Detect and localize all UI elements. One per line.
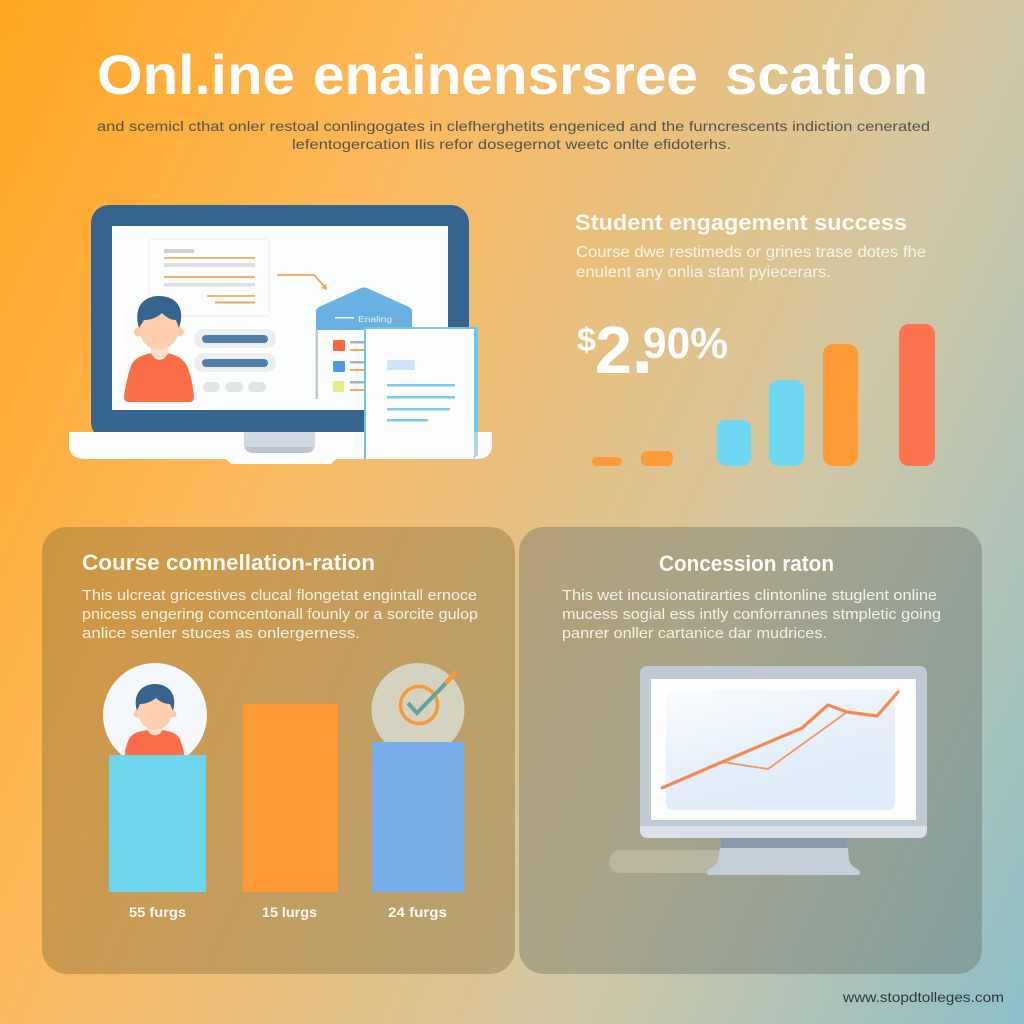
bar labels: 55 furgs: [129, 904, 186, 920]
laptop screen: [112, 226, 448, 410]
course panel heading: Course comnellation-ration: [82, 550, 375, 575]
big statistic: .: [632, 302, 653, 390]
title: [97, 43, 928, 106]
document sheet: [364, 327, 478, 459]
concession panel text: mucess sogial ess intly conforrannes stmpletic going: [562, 607, 941, 623]
laptop lid: [91, 205, 469, 440]
title: Onl.ine: [97, 43, 295, 106]
text card on screen: [150, 240, 268, 315]
title: enainensrsree: [313, 43, 698, 106]
student engagement text: [576, 244, 926, 281]
line chart: [662, 690, 898, 810]
bar chart: engagement: [592, 324, 935, 466]
laptop base: [69, 432, 492, 464]
bar labels: 24 furgs: [388, 904, 447, 920]
pills on screen: [194, 329, 276, 392]
big statistic: 90%: [643, 319, 728, 368]
monitor body: [640, 666, 927, 838]
connector arrow: [277, 275, 327, 290]
concession panel text: This wet incusionatirarties clintonline stuglent online: [562, 588, 937, 604]
student engagement text: Course dwe restimeds or grines trase dotes fhe: [576, 244, 926, 261]
monitor illustration: [609, 666, 927, 875]
desk shadow: [609, 850, 739, 873]
footer url: www.stopdtolleges.com: [842, 989, 1004, 1005]
icon: avatar in circle: [103, 663, 207, 755]
bar labels: [129, 904, 447, 920]
bar labels: 15 lurgs: [262, 904, 317, 920]
laptop illustration: [69, 205, 492, 464]
person avatar on screen: [124, 296, 194, 402]
house shaped list card: [316, 288, 412, 399]
panel: course completion: [42, 527, 515, 974]
concession panel text: [562, 588, 941, 642]
panel: concession: [519, 527, 982, 974]
big statistic: [577, 302, 728, 390]
title: scation: [725, 43, 928, 106]
concession panel heading: Concession raton: [659, 551, 834, 576]
course panel text: [82, 588, 478, 642]
student engagement text: enulent any onlia stant pyiecerars.: [576, 264, 831, 281]
monitor screen: [651, 679, 916, 820]
concession panel text: panrer onller cartanice dar mudrices.: [562, 626, 827, 642]
subtitle text: [97, 118, 930, 152]
laptop hinge: [244, 432, 315, 453]
course panel text: pnicess engering comcentonall founly or a sorcite gulop: [82, 607, 478, 623]
subtitle text: lefentogercation Ilis refor dosegernot weetc onlte efidoterhs.: [292, 136, 731, 152]
course panel text: anlice senler stuces as onlergerness.: [82, 626, 360, 642]
icon: checkmark in circle: [372, 663, 464, 742]
monitor stand: [707, 838, 860, 875]
course panel text: This ulcreat gricestives clucal flongetat engintall ernoce: [82, 588, 477, 604]
student engagement heading: Student engagement success: [575, 210, 907, 235]
subtitle text: and scemicl cthat onler restoal conlingogates in clefherghetits engeniced and the furncrescents indiction cenerated: [97, 118, 930, 134]
big statistic: 2: [595, 313, 632, 388]
house shaped list card: Enaling: [358, 315, 392, 324]
bar chart: course completion: [109, 704, 464, 892]
big statistic: $: [577, 321, 596, 358]
